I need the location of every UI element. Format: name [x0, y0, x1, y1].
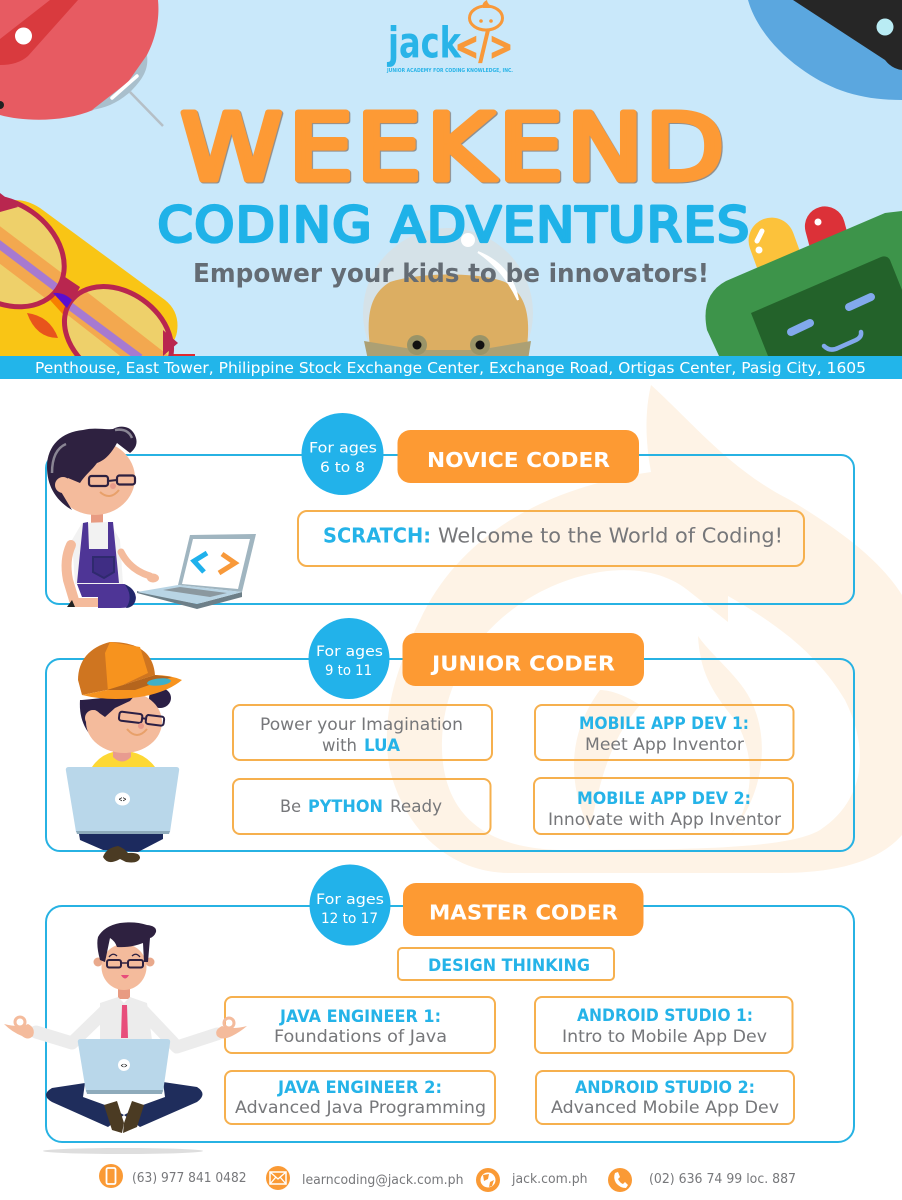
subtitle: CODING ADVENTURES: CODING ADVENTURES	[158, 196, 749, 253]
course box: lua	[233, 705, 492, 760]
age badge 6 to 8: 6 to 8	[320, 460, 365, 476]
heading pill: junior coder	[402, 633, 644, 686]
character: junior boy with cap and laptop	[66, 642, 182, 862]
icon: globe	[476, 1168, 500, 1192]
contact: website: jack.com.ph	[511, 1172, 588, 1187]
icon: mobile phone	[99, 1164, 123, 1188]
age badge 9 to 11	[308, 618, 390, 699]
character: junior boy with cap and laptop: <>	[118, 796, 127, 804]
contact: mobile	[99, 1164, 246, 1188]
course box: android studio 2: ANDROID STUDIO 2:	[575, 1078, 755, 1098]
character: master man meditating with laptop	[4, 922, 247, 1154]
master panel frame	[46, 906, 854, 1142]
contact: website	[476, 1168, 588, 1192]
course box: mobile app dev 1	[535, 705, 794, 760]
course box: lua: with	[322, 736, 357, 756]
tagline: Empower your kids to be innovators!	[193, 259, 709, 289]
course box: java engineer 2: JAVA ENGINEER 2:	[277, 1078, 442, 1098]
course box: scratch: Welcome to the World of Coding!	[438, 524, 783, 548]
contact: landline	[608, 1168, 796, 1192]
illustration: blue planet top right	[748, 0, 902, 100]
course box: design thinking	[398, 948, 614, 980]
character: novice boy with laptop	[47, 427, 256, 609]
panel: junior coder	[46, 618, 854, 851]
age badge 12 to 17	[310, 864, 390, 946]
heading pill: junior coder: JUNIOR CODER	[430, 652, 615, 676]
illustration: yellow planet with glasses	[0, 193, 195, 356]
course box: java engineer 2: Advanced Java Programming	[235, 1098, 486, 1118]
heading pill: novice coder: NOVICE CODER	[427, 448, 610, 472]
age badge 12 to 17: For ages	[316, 892, 384, 908]
icon: envelope	[266, 1166, 290, 1190]
logo: jack: jack	[386, 19, 462, 69]
hero banner background	[0, 0, 902, 357]
logo: jack	[386, 0, 513, 74]
panel: master coder	[46, 864, 854, 1142]
age badge 9 to 11: 9 to 11	[325, 663, 372, 679]
course box: mobile app dev 1: Meet App Inventor	[585, 735, 744, 755]
age badge 6 to 8: For ages	[309, 440, 377, 456]
course box: java engineer 1: JAVA ENGINEER 1:	[279, 1007, 441, 1027]
watermark: pale flame logo	[387, 385, 902, 873]
contact: email: learncoding@jack.com.ph	[302, 1173, 464, 1188]
illustration: glass helmet creature	[363, 228, 533, 356]
logo: jack: </>	[455, 25, 513, 68]
course box: android studio 1	[535, 997, 792, 1053]
course box: python: PYTHON	[308, 797, 383, 817]
illustration: red planet top left	[0, 0, 163, 126]
course box: design thinking: DESIGN THINKING	[428, 956, 590, 976]
junior panel frame	[46, 659, 854, 851]
address bar	[0, 356, 902, 379]
course box: java engineer 2	[225, 1071, 495, 1124]
age badge 6 to 8	[302, 413, 384, 495]
heading pill: master coder: MASTER CODER	[429, 900, 618, 924]
character: master man meditating with laptop: <>	[120, 1062, 128, 1070]
course box: scratch	[298, 511, 804, 566]
contact: landline: (02) 636 74 99 loc. 887	[649, 1172, 796, 1187]
age badge 12 to 17: 12 to 17	[321, 911, 378, 927]
age badge 9 to 11: For ages	[316, 644, 383, 660]
contact: mobile: (63) 977 841 0482	[132, 1171, 246, 1186]
course box: mobile app dev 2: Innovate with App Inventor	[548, 810, 781, 830]
course box: python: Ready	[390, 797, 442, 817]
heading pill: novice coder	[398, 430, 639, 483]
course box: mobile app dev 1: MOBILE APP DEV 1:	[579, 714, 749, 734]
course box: python: Be	[280, 797, 301, 817]
heading pill: master coder	[403, 883, 644, 936]
course box: android studio 2: Advanced Mobile App Dev	[551, 1098, 779, 1118]
course box: mobile app dev 2	[534, 778, 793, 834]
illustration: green robot with bulbs	[706, 202, 902, 356]
course box: android studio 1: ANDROID STUDIO 1:	[577, 1006, 753, 1026]
panel: novice coder	[46, 413, 854, 604]
novice panel frame	[46, 455, 854, 604]
logo: jack: JUNIOR ACADEMY FOR CODING KNOWLEDGE, INC.	[386, 68, 513, 74]
course box: mobile app dev 2: MOBILE APP DEV 2:	[577, 789, 751, 809]
course box: java engineer 1	[225, 997, 495, 1053]
course box: android studio 1: Intro to Mobile App Dev	[562, 1027, 767, 1047]
course box: lua: Power your Imagination	[260, 715, 463, 735]
address bar: Penthouse, East Tower, Philippine Stock Exchange Center, Exchange Road, Ortigas Center, Pasig City, 1605	[35, 359, 866, 377]
icon: handset	[608, 1168, 632, 1192]
course box: scratch: SCRATCH:	[323, 524, 431, 548]
course box: java engineer 1: Foundations of Java	[274, 1027, 447, 1047]
contact: email	[266, 1166, 464, 1190]
course box: android studio 2	[536, 1071, 794, 1124]
course box: python	[233, 779, 490, 834]
title: WEEKEND: WEEKEND	[180, 95, 724, 202]
course box: lua: LUA	[364, 736, 401, 756]
